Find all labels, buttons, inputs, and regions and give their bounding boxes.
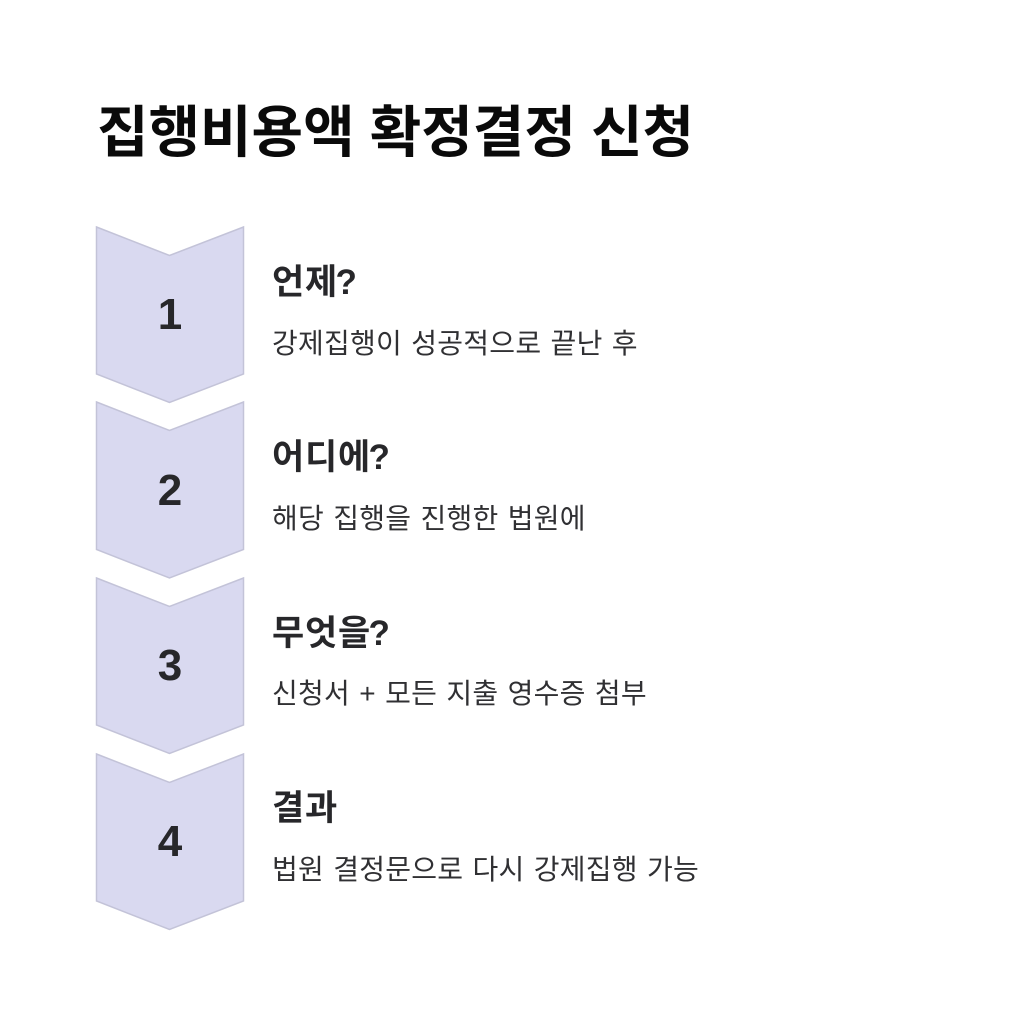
- step 2 description: 해당 집행을 진행한 법원에: [272, 503, 586, 534]
- step 2 chevron: [96, 402, 244, 578]
- step 4 description: 법원 결정문으로 다시 강제집행 가능: [272, 854, 699, 885]
- step 4 chevron: [96, 754, 244, 930]
- step 3 chevron: 3: [158, 641, 182, 690]
- step 1 chevron: 1: [158, 290, 182, 339]
- step 1 chevron: [96, 227, 244, 402]
- step 2 heading: 어디에?: [272, 438, 391, 477]
- title: 집행비용액 확정결정 신청: [97, 101, 694, 164]
- step 3 chevron: [96, 578, 244, 754]
- step 3 description: 신청서 + 모든 지출 영수증 첨부: [272, 678, 647, 709]
- step 4 chevron: 4: [158, 817, 183, 866]
- step 2 chevron: 2: [158, 466, 182, 515]
- step 3 heading: 무엇을?: [272, 614, 391, 653]
- step 1 heading: 언제?: [272, 263, 358, 302]
- step 1 description: 강제집행이 성공적으로 끝난 후: [272, 328, 638, 359]
- step 4 heading: 결과: [272, 789, 338, 828]
